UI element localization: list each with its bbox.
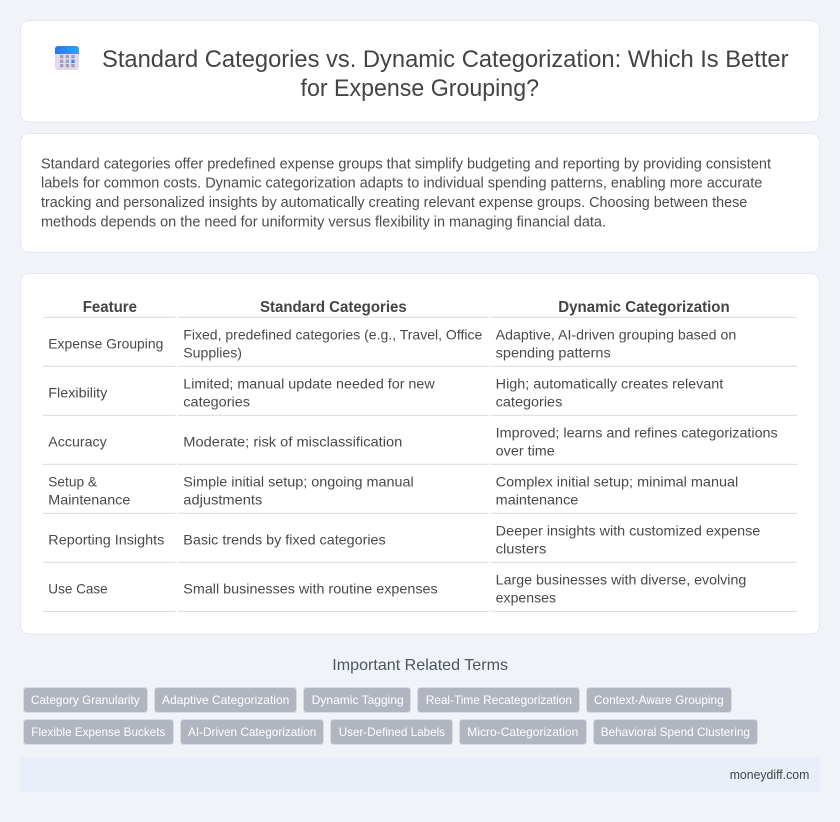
row: setup and maintenance: Complex initial setup; minimal manual xyxy=(496,473,738,489)
tag: AI-Driven Categorization xyxy=(188,725,316,739)
row: reporting insights: Basic trends by fixed categories xyxy=(183,531,386,547)
row: accuracy: Moderate; risk of misclassification xyxy=(183,433,402,449)
row: expense grouping: Expense Grouping xyxy=(48,335,163,351)
text block: introduction: Standard categories offer predefined expense groups that simplify budgeting and reporting by providing consistent xyxy=(41,156,771,172)
row: expense grouping: spending patterns xyxy=(496,344,611,360)
row: flexibility: Limited; manual update needed for new xyxy=(183,375,436,391)
row: expense grouping xyxy=(43,326,797,366)
icon: calendar xyxy=(55,46,79,70)
tag: Category Granularity xyxy=(31,693,140,707)
tag: Micro-Categorization xyxy=(467,725,578,739)
tag: Behavioral Spend Clustering xyxy=(601,725,750,739)
row: accuracy: Accuracy xyxy=(48,433,107,449)
table header: Feature xyxy=(83,299,137,316)
footer bar xyxy=(20,758,820,792)
tag xyxy=(304,688,410,712)
text block: introduction xyxy=(41,156,771,230)
title: for Expense Grouping? xyxy=(300,75,539,102)
row: reporting insights xyxy=(43,522,797,562)
row: use case xyxy=(43,571,797,611)
text block: introduction: tracking and personalized insights by automatically creating relevant expense groups. Choosing between these xyxy=(41,195,747,211)
heading: related terms: Important Related Terms xyxy=(332,657,508,674)
row: flexibility: Flexibility xyxy=(48,384,107,400)
row: reporting insights: Deeper insights with customized expense xyxy=(496,522,761,538)
tag xyxy=(460,720,586,744)
row: expense grouping: Supplies) xyxy=(183,344,242,360)
row: reporting insights: clusters xyxy=(496,540,546,556)
tag group: related terms xyxy=(24,688,758,744)
row: setup and maintenance: Setup & xyxy=(48,473,98,489)
row: accuracy: Improved; learns and refines categorizations xyxy=(496,424,778,440)
tag xyxy=(418,688,580,712)
row: flexibility: categories xyxy=(183,393,250,409)
row: use case: expenses xyxy=(496,589,556,605)
panel: comparison table xyxy=(20,274,820,634)
row: reporting insights: Reporting Insights xyxy=(48,531,164,547)
tag xyxy=(330,720,452,744)
row: use case: Use Case xyxy=(48,580,108,596)
row: setup and maintenance xyxy=(43,473,797,513)
table header: Standard Categories xyxy=(260,299,407,316)
row: setup and maintenance: maintenance xyxy=(496,491,579,507)
tag xyxy=(154,688,296,712)
row: expense grouping: Adaptive, AI-driven grouping based on xyxy=(496,326,736,342)
row: accuracy: over time xyxy=(496,442,555,458)
row: flexibility: categories xyxy=(496,393,562,409)
row: setup and maintenance: Simple initial setup; ongoing manual xyxy=(183,473,414,489)
row: use case: Small businesses with routine expenses xyxy=(183,580,438,596)
panel: title card xyxy=(20,20,820,122)
tag: Context-Aware Grouping xyxy=(594,693,724,707)
panel: intro text xyxy=(20,134,820,252)
title xyxy=(102,46,789,102)
text block: introduction: methods depends on the need for uniformity versus flexibility in managing financial data. xyxy=(41,214,606,230)
tag xyxy=(24,688,148,712)
tag xyxy=(586,688,732,712)
row: setup and maintenance: adjustments xyxy=(183,491,262,507)
row: expense grouping: Fixed, predefined categories (e.g., Travel, Office xyxy=(183,326,483,342)
tag: Dynamic Tagging xyxy=(312,693,404,707)
row: flexibility xyxy=(43,375,797,415)
tag xyxy=(24,720,174,744)
tag: Flexible Expense Buckets xyxy=(31,725,165,739)
tag: Adaptive Categorization xyxy=(162,693,289,707)
text block: introduction: labels for common costs. Dynamic categorization adapts to individual spending patterns, enabling more accurate xyxy=(41,175,762,191)
tag xyxy=(180,720,324,744)
table header xyxy=(43,299,797,317)
tag: Real-Time Recategorization xyxy=(426,693,572,707)
title: Standard Categories vs. Dynamic Categorization: Which Is Better xyxy=(102,46,789,73)
table header: Dynamic Categorization xyxy=(558,299,730,316)
tag xyxy=(594,720,758,744)
tag: User-Defined Labels xyxy=(339,725,445,739)
footer source label: moneydiff.com xyxy=(730,767,809,782)
row: setup and maintenance: Maintenance xyxy=(48,491,131,507)
row: use case: Large businesses with diverse, evolving xyxy=(496,571,746,587)
row: flexibility: High; automatically creates relevant xyxy=(496,375,723,391)
row: accuracy xyxy=(43,424,797,464)
